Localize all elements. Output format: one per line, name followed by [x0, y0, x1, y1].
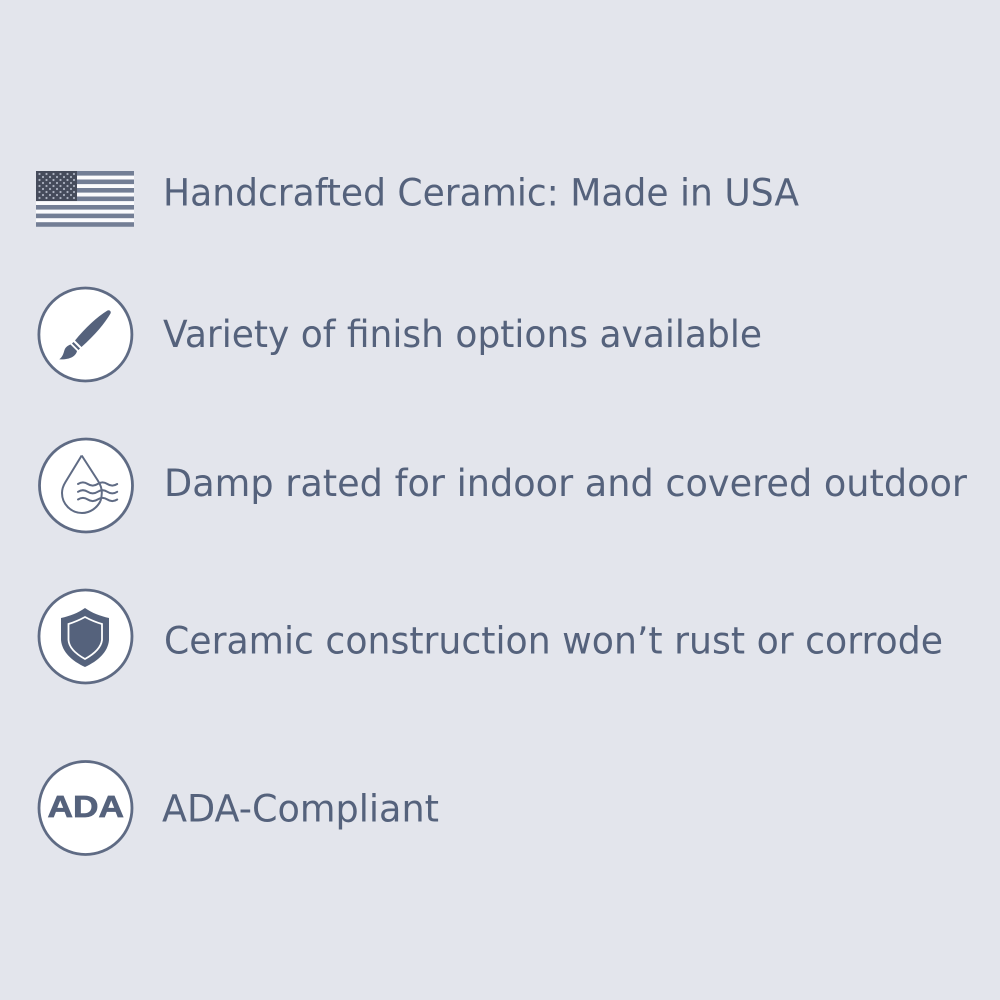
- feature row: made in USA: [36, 171, 799, 227]
- label: damp rated: Damp rated for indoor and covered outdoor: [164, 462, 968, 505]
- label: rust resistant: Ceramic construction won’t rust or corrode: [164, 620, 943, 662]
- icon: american flag: [36, 171, 134, 227]
- icon: ADA badge: [39, 762, 132, 854]
- label: ADA compliant: ADA-Compliant: [162, 788, 439, 830]
- feature row: rust resistant: [39, 590, 943, 683]
- feature row: damp rated: [40, 439, 968, 532]
- feature row: finish options: [39, 288, 762, 381]
- icon: paint brush: [39, 288, 132, 381]
- label: finish options: Variety of finish options available: [163, 313, 762, 356]
- icon: ADA badge: ADA: [48, 790, 124, 824]
- icon: water drop with waves: [40, 439, 132, 532]
- icon: shield: [39, 590, 132, 683]
- feature row: ADA compliant: [39, 762, 439, 854]
- label: made in USA: Handcrafted Ceramic: Made in USA: [163, 172, 799, 214]
